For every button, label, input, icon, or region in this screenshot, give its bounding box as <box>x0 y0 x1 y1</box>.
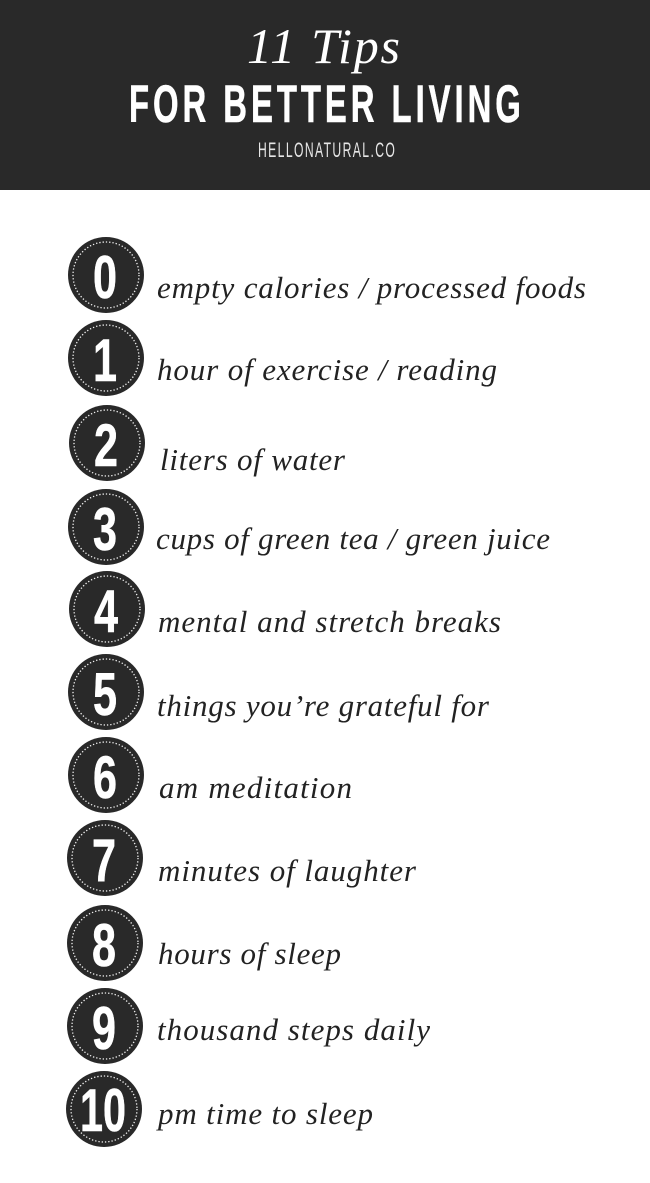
tip 6: 6 <box>93 744 117 811</box>
tip 10: pm time to sleep <box>156 1096 373 1131</box>
tip 10 <box>66 1071 373 1147</box>
tip 8 <box>67 905 341 981</box>
tip 0 <box>68 237 586 313</box>
tip 5 <box>68 654 490 730</box>
tip 7 <box>67 820 417 896</box>
tip 9: 9 <box>92 995 116 1062</box>
tip 3 <box>68 489 550 565</box>
tip 6 <box>68 737 352 813</box>
tip 7: 7 <box>92 827 116 894</box>
website credit: HELLONATURAL.CO <box>258 137 395 162</box>
tip 4: mental and stretch breaks <box>158 604 501 639</box>
tip 3: cups of green tea / green juice <box>156 521 550 556</box>
tip 1: hour of exercise / reading <box>157 352 497 387</box>
tip 5: things you’re grateful for <box>157 688 490 723</box>
tip 0: empty calories / processed foods <box>157 270 586 305</box>
tip 2: 2 <box>94 412 118 479</box>
heading: for better living: FOR BETTER LIVING <box>129 75 521 134</box>
tip 6: am meditation <box>159 770 352 805</box>
tip 10: 10 <box>80 1077 126 1144</box>
header banner <box>0 0 650 190</box>
tip 1: 1 <box>93 327 117 394</box>
tip 7: minutes of laughter <box>158 853 417 888</box>
tip 8: hours of sleep <box>158 936 341 971</box>
tip 9: thousand steps daily <box>157 1012 430 1047</box>
tip 1 <box>68 320 497 396</box>
tip 9 <box>67 988 430 1064</box>
tip 4: 4 <box>94 578 118 645</box>
tip 0: 0 <box>93 244 117 311</box>
tip 5: 5 <box>93 661 117 728</box>
tip 4 <box>69 571 501 647</box>
tip 3: 3 <box>93 496 117 563</box>
title: 11 Tips: 11 Tips <box>247 18 400 74</box>
tip 8: 8 <box>92 912 116 979</box>
tip 2: liters of water <box>160 442 346 477</box>
tip 2 <box>69 405 346 481</box>
